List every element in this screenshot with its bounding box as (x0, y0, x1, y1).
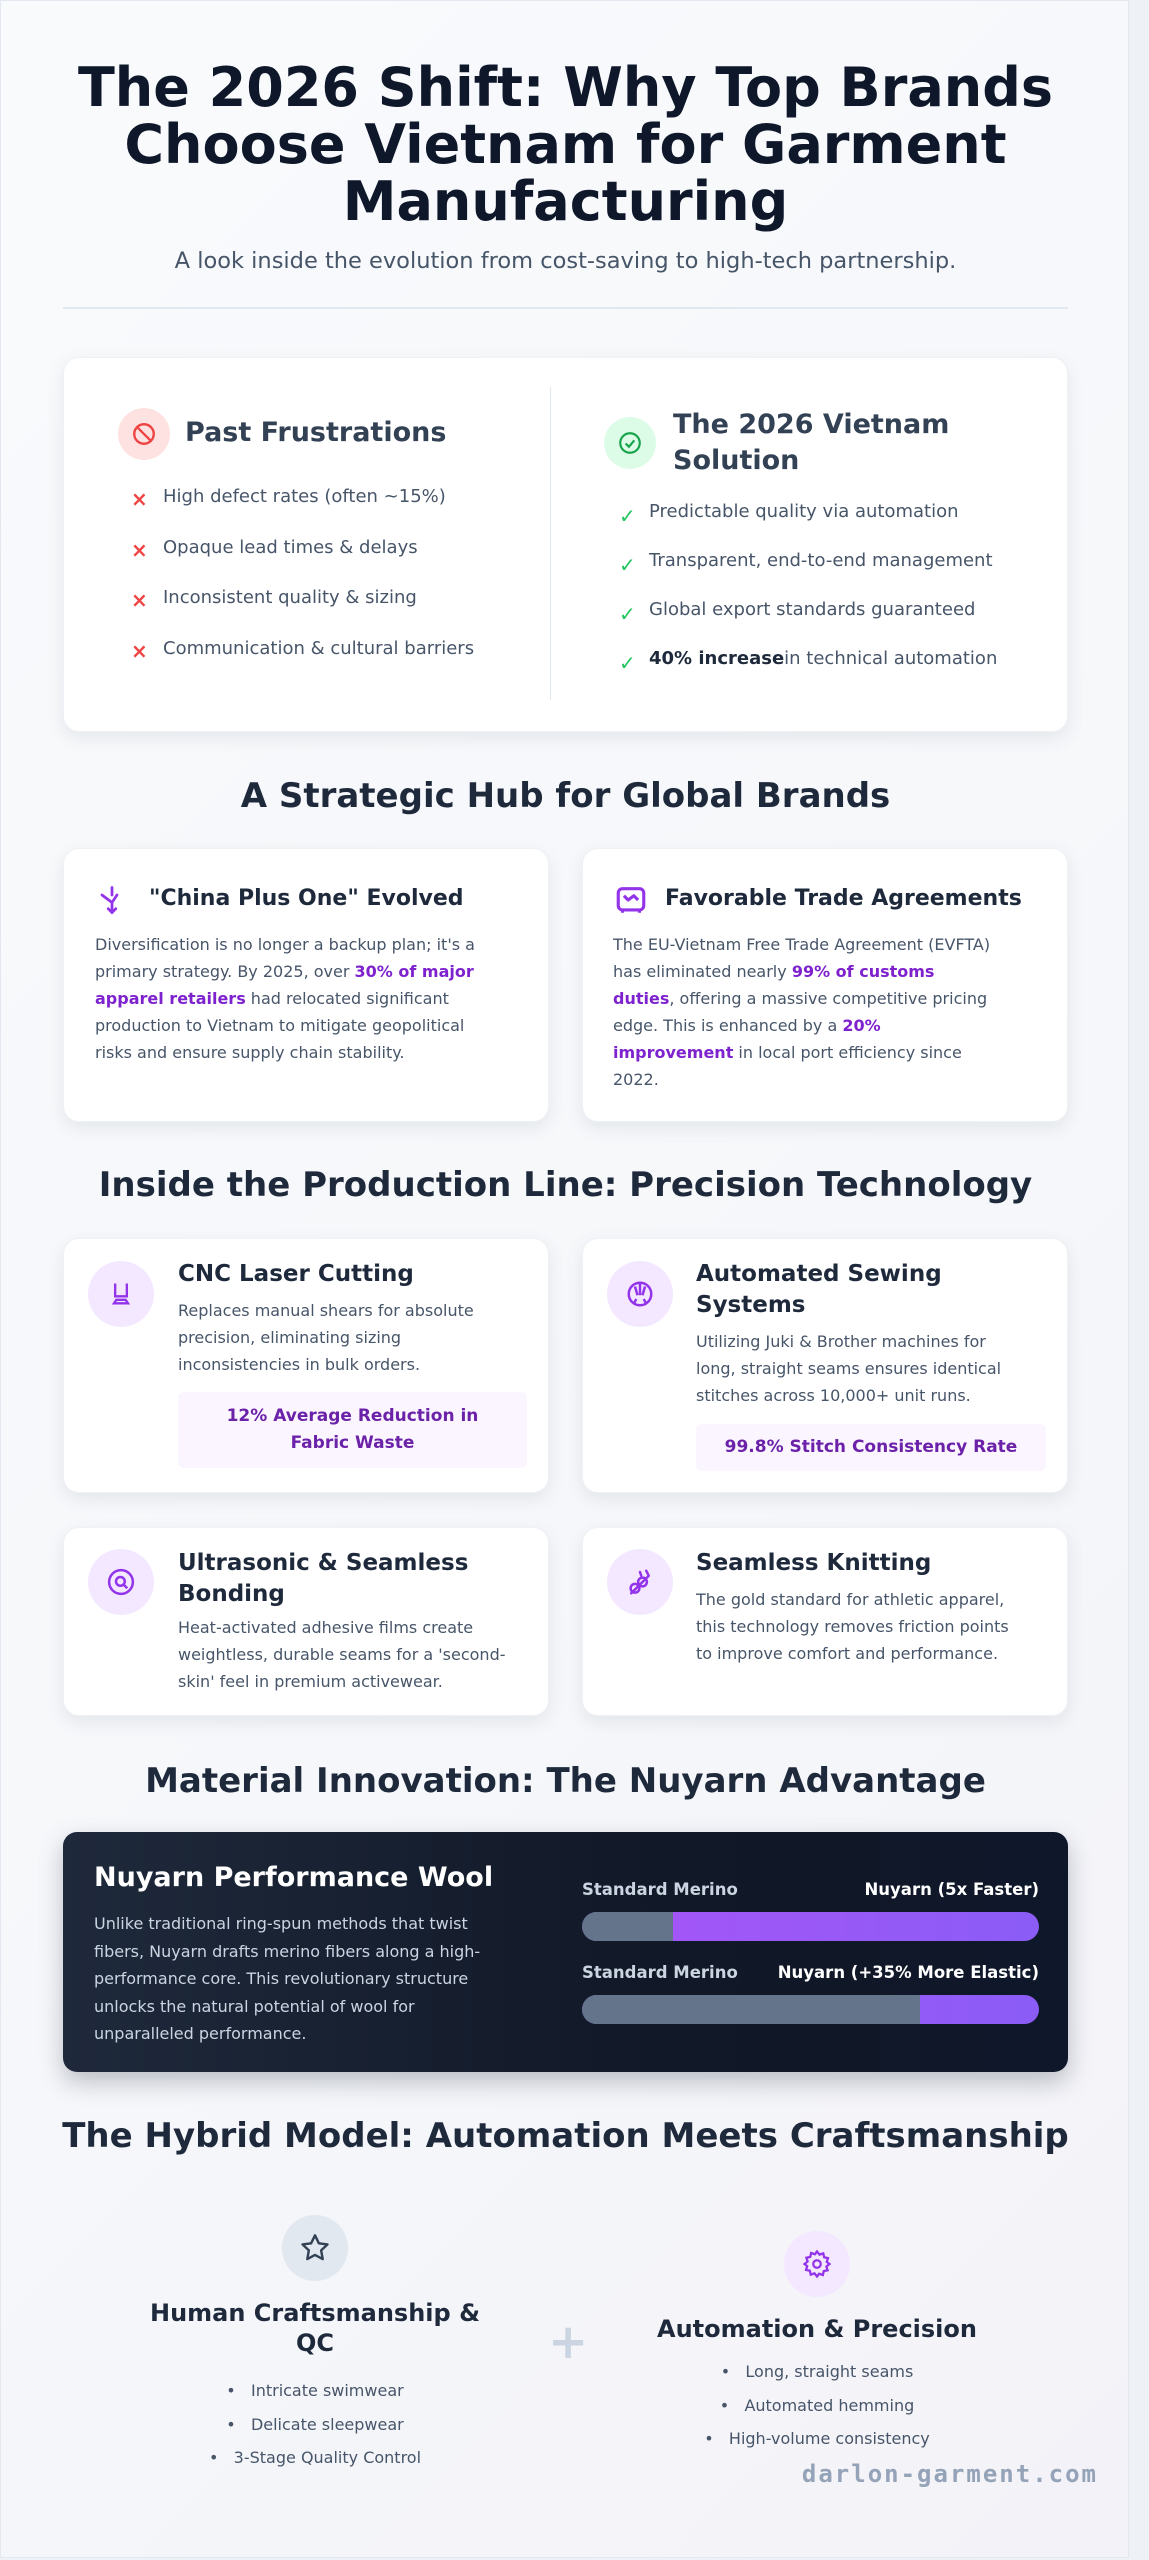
text: stitches across 10,000+ unit runs. (696, 1386, 971, 1405)
text: The gold standard for athletic apparel, (696, 1590, 1004, 1609)
text: Heat-activated adhesive films create (178, 1618, 473, 1637)
stat (178, 1392, 527, 1468)
panel text (94, 1914, 480, 2043)
text: Replaces manual shears for absolute (178, 1301, 474, 1320)
title: Automation & Precision (657, 2315, 977, 2343)
card text: improvement in local port efficiency since (613, 1043, 962, 1062)
title (178, 1550, 468, 1607)
text: skin' feel in premium activewear. (178, 1672, 443, 1691)
bar chart: speed: Nuyarn (5x Faster) (864, 1880, 1039, 1899)
card text: has eliminated nearly 99% of customs (613, 962, 934, 981)
card: seamless knitting (582, 1527, 1068, 1716)
list: frustrations: Opaque lead times & delays (163, 537, 418, 558)
icon: knitting (607, 1549, 673, 1615)
icon: search circle (88, 1549, 154, 1615)
list: solutions: ✓ (619, 553, 636, 577)
title: Systems (696, 1292, 806, 1318)
bullets: • 3-Stage Quality Control (209, 2448, 421, 2467)
bullets: • High-volume consistency (704, 2429, 930, 2448)
text: weightless, durable seams for a 'second- (178, 1645, 506, 1664)
card text: primary strategy. By 2025, over 30% of major (95, 962, 474, 981)
text: inconsistencies in bulk orders. (178, 1355, 420, 1374)
card text: edge. This is enhanced by a 20% (613, 1016, 881, 1035)
stat: 99.8% Stitch Consistency Rate (725, 1437, 1017, 1457)
card title: Favorable Trade Agreements (665, 886, 1022, 911)
heading: 2026 solution: The 2026 Vietnam (673, 409, 949, 440)
icon: check circle (604, 417, 656, 469)
stat: 12% Average Reduction in (227, 1406, 478, 1426)
list: frustrations: × (131, 538, 148, 562)
card text: production to Vietnam to mitigate geopolitical (95, 1016, 464, 1035)
title (696, 1261, 942, 1318)
title: Choose Vietnam for Garment (124, 113, 1007, 176)
card text (95, 935, 475, 1062)
footer: website: darlon-garment.com (802, 2460, 1098, 2488)
title (78, 56, 1053, 233)
text (696, 1590, 1009, 1663)
heading: past frustrations: Past Frustrations (185, 417, 446, 448)
bullets: • Long, straight seams (721, 2362, 913, 2381)
text: to improve comfort and performance. (696, 1644, 998, 1663)
panel text: performance core. This revolutionary structure (94, 1969, 468, 1988)
list: frustrations (131, 486, 474, 663)
text: precision, eliminating sizing (178, 1328, 401, 1347)
icon: star (282, 2215, 348, 2281)
icon: split arrow (100, 886, 118, 914)
bar chart: elasticity: Nuyarn (+35% More Elastic) (778, 1963, 1039, 1982)
panel: nuyarn (63, 1832, 1068, 2072)
text: long, straight seams ensures identical (696, 1359, 1001, 1378)
panel: past vs solution (63, 357, 1068, 732)
bar chart: elasticity: Standard Merino (582, 1963, 738, 1982)
icon: plus: + (548, 2314, 588, 2370)
card text: apparel retailers had relocated significant (95, 989, 449, 1008)
card text: duties, offering a massive competitive pricing (613, 989, 987, 1008)
list: solutions: ✓ (619, 651, 636, 675)
card: CNC laser cutting (63, 1238, 549, 1493)
card: trade agreements (582, 848, 1068, 1122)
bullets: • Intricate swimwear (226, 2381, 404, 2400)
icon: prohibited (118, 408, 170, 460)
column: automation (657, 2231, 977, 2448)
heading: 2026 solution (673, 409, 949, 476)
card text: 2022. (613, 1070, 659, 1089)
card title: "China Plus One" Evolved (149, 886, 464, 911)
title: Manufacturing (343, 170, 788, 233)
title: Automated Sewing (696, 1261, 942, 1287)
text (178, 1301, 474, 1374)
icon: handshake (616, 887, 646, 913)
heading: hybrid model: The Hybrid Model: Automation Meets Craftsmanship (62, 2116, 1069, 2156)
card: ultrasonic bonding (63, 1527, 549, 1716)
bullets (704, 2362, 930, 2448)
icon: laser (88, 1261, 154, 1327)
title: Human Craftsmanship & (150, 2299, 480, 2327)
panel text: Unlike traditional ring-spun methods that twist (94, 1914, 468, 1933)
column: human craftsmanship (150, 2215, 480, 2467)
list: frustrations: High defect rates (often ~15%) (163, 486, 446, 507)
card text (612, 935, 990, 1089)
list: frustrations: × (131, 588, 148, 612)
panel text: unparalleled performance. (94, 2024, 306, 2043)
text (178, 1618, 506, 1691)
heading: 2026 solution: Solution (673, 445, 799, 476)
title: The 2026 Shift: Why Top Brands (78, 56, 1053, 119)
card: china plus one (63, 848, 549, 1122)
title: QC (296, 2329, 334, 2357)
list: solutions (619, 501, 997, 675)
subtitle: A look inside the evolution from cost-saving to high-tech partnership. (175, 248, 956, 274)
list: frustrations: × (131, 487, 148, 511)
card: automated sewing (582, 1238, 1068, 1493)
list: solutions: Transparent, end-to-end management (649, 550, 993, 571)
heading: production line: Inside the Production Line: Precision Technology (99, 1165, 1032, 1205)
list: frustrations: Inconsistent quality & sizing (163, 587, 417, 608)
bullets (209, 2381, 421, 2467)
stat: Fabric Waste (291, 1433, 414, 1453)
icon: gear (784, 2231, 850, 2297)
list: solutions: 40% increasein technical automation (649, 648, 997, 669)
stat (696, 1424, 1046, 1471)
list: frustrations: Communication & cultural barriers (163, 638, 474, 659)
title: Seamless Knitting (696, 1550, 931, 1576)
title: Ultrasonic & Seamless (178, 1550, 468, 1576)
bullets: • Automated hemming (720, 2396, 914, 2414)
heading: strategic hub: A Strategic Hub for Global Brands (241, 776, 890, 816)
card text: Diversification is no longer a backup plan; it's a (95, 935, 475, 954)
text (696, 1332, 1001, 1405)
title: Bonding (178, 1581, 285, 1607)
list: solutions: ✓ (619, 504, 636, 528)
list: frustrations: × (131, 639, 148, 663)
bar chart: speed: Standard Merino (582, 1880, 738, 1899)
list: solutions: ✓ (619, 602, 636, 626)
icon: sewing (607, 1261, 673, 1327)
panel title: Nuyarn Performance Wool (94, 1862, 493, 1893)
card text: The EU-Vietnam Free Trade Agreement (EVFTA) (613, 935, 990, 954)
list: solutions: Predictable quality via automation (649, 501, 959, 522)
bar chart: speed (582, 1880, 1039, 1941)
bar chart: elasticity (582, 1963, 1039, 2024)
title (150, 2299, 480, 2357)
text: Utilizing Juki & Brother machines for (696, 1332, 986, 1351)
bullets: • Delicate sleepwear (226, 2414, 404, 2434)
text: this technology removes friction points (696, 1617, 1009, 1636)
panel text: fibers, Nuyarn drafts merino fibers along a high- (94, 1942, 480, 1960)
panel text: unlocks the natural potential of wool for (94, 1996, 415, 2016)
card text: risks and ensure supply chain stability. (95, 1043, 405, 1062)
heading: material innovation: Material Innovation: The Nuyarn Advantage (145, 1761, 986, 1801)
title: CNC Laser Cutting (178, 1261, 414, 1287)
list: solutions: Global export standards guaranteed (649, 599, 975, 620)
